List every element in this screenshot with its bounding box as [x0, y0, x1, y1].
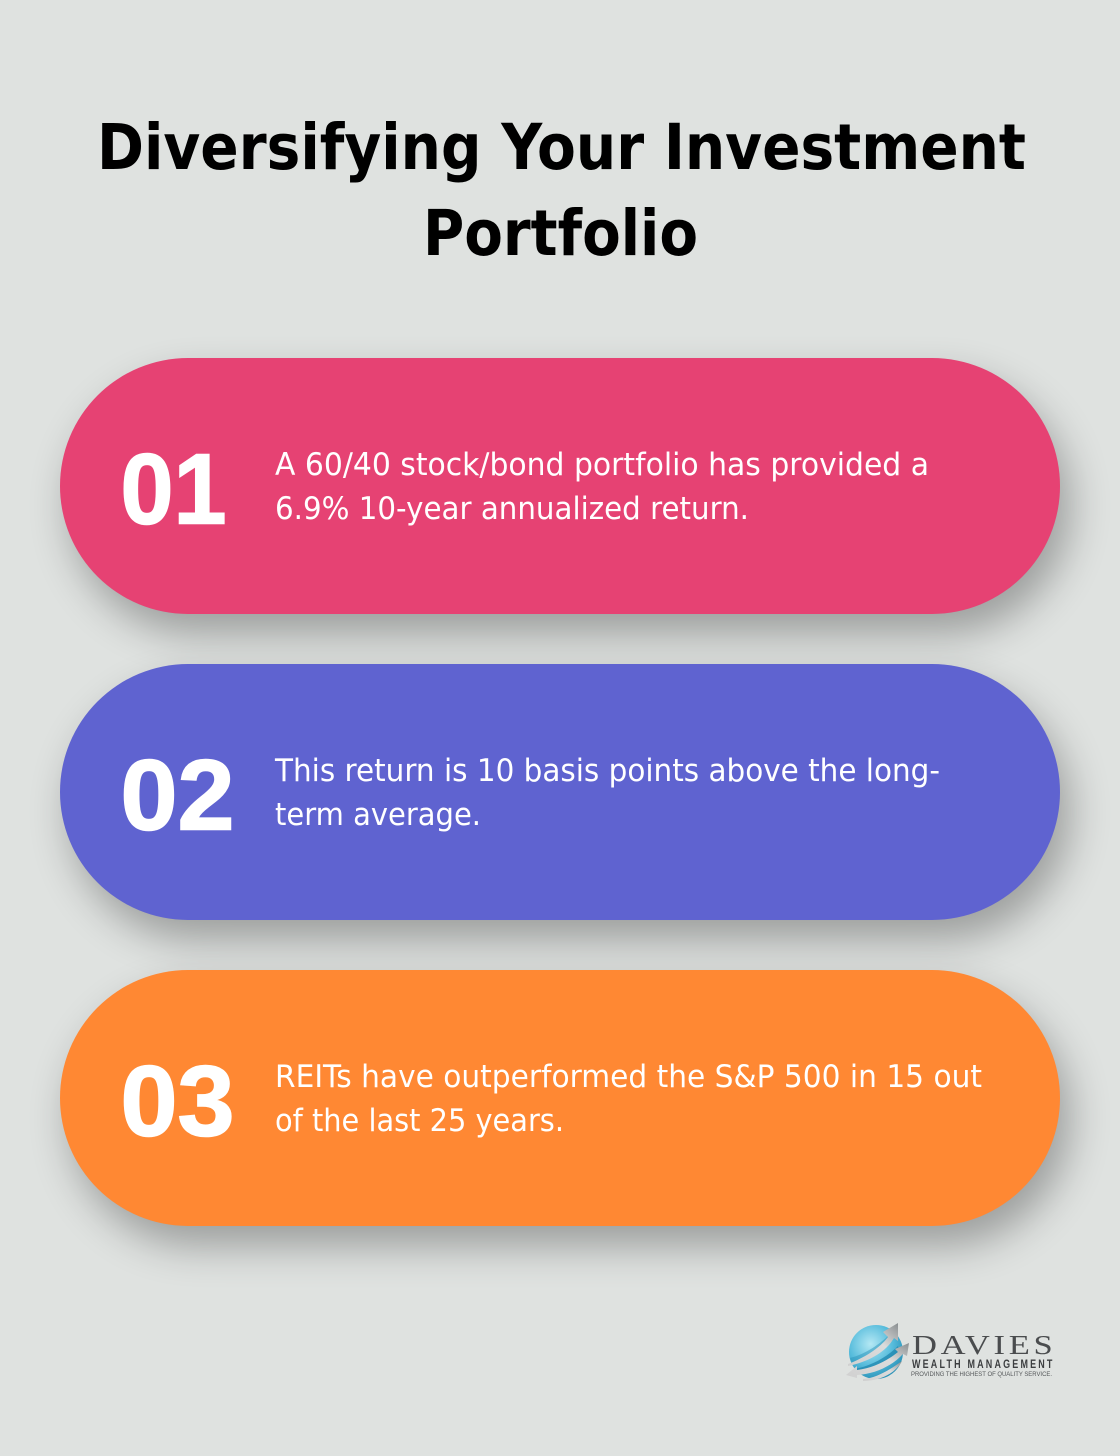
number 03: 03: [120, 1046, 234, 1158]
icon: globe with arrows: [846, 1323, 909, 1381]
title: [97, 111, 1026, 270]
text: step 02: [274, 753, 940, 833]
text: step 03: of the last 25 years.: [275, 1103, 564, 1139]
number 01: 01: [120, 434, 226, 546]
text: step 01: [275, 447, 929, 527]
text: step 03: REITs have outperformed the S&P 500 in 15 out: [275, 1059, 982, 1095]
panel: step 02: [60, 664, 1060, 920]
logo wordmark: PROVIDING THE HIGHEST OF QUALITY SERVICE.: [911, 1372, 1052, 1378]
title: Diversifying Your Investment: [97, 111, 1026, 184]
text: step 01: A 60/40 stock/bond portfolio has provided a: [275, 447, 929, 483]
text: step 03: [275, 1059, 982, 1139]
logo wordmark: DAVIES: [912, 1330, 1053, 1360]
title: Portfolio: [423, 197, 698, 270]
text: step 01: 6.9% 10-year annualized return.: [275, 491, 749, 527]
logo: Davies Wealth Management: [846, 1323, 1053, 1381]
text: step 02: This return is 10 basis points above the long-: [274, 753, 940, 789]
panel: step 03: [60, 970, 1060, 1226]
panel: step 01: [60, 358, 1060, 614]
number 02: 02: [120, 740, 234, 852]
text: step 02: term average.: [275, 797, 481, 833]
logo wordmark: [911, 1330, 1053, 1378]
logo wordmark: WEALTH MANAGEMENT: [912, 1359, 1053, 1371]
